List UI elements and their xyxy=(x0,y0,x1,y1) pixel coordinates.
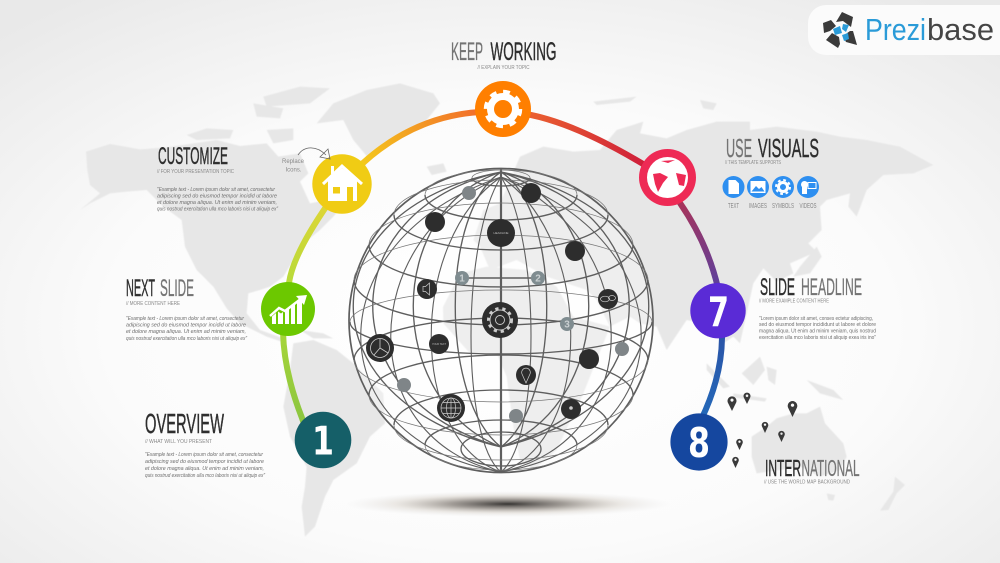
map: Greenland xyxy=(317,83,440,160)
arc segment: home to gear xyxy=(358,112,480,167)
heading: international: NATIONAL xyxy=(802,455,860,481)
body text: customize: "Example text - Lorem ipsum dolor sit amet, consectetur xyxy=(157,187,275,193)
logo badge xyxy=(808,5,1000,55)
step 7 circle xyxy=(690,283,746,338)
body text: next slide: adipiscing sed do eiusmod tempor incidid ut labore xyxy=(126,322,246,328)
body text: overview: et dolore magna aliqua. Ut enim ad minim veniam, xyxy=(145,466,264,472)
node: headline xyxy=(487,219,515,247)
home icon circle xyxy=(312,154,372,214)
pin 4 xyxy=(762,422,768,433)
step 8 circle xyxy=(670,413,728,471)
chart icon circle xyxy=(261,282,315,336)
map: North America xyxy=(80,140,367,343)
logo mark xyxy=(823,12,857,48)
icon: symbols xyxy=(772,176,794,198)
subheading: next slide: // MORE CONTENT HERE xyxy=(126,301,180,307)
icon: text xyxy=(722,176,744,198)
heading: keep working: KEEP xyxy=(451,38,483,66)
subheading: customize: // FOR YOUR PRESENTATION TOPIC xyxy=(157,169,234,175)
pin 7 xyxy=(732,457,739,468)
icon labels: SYMBOLS xyxy=(772,203,794,210)
node: number 1: 1 xyxy=(459,274,465,284)
node: map pin icon xyxy=(516,365,536,385)
pin 5 xyxy=(778,431,785,442)
map: Indonesia and New Guinea xyxy=(707,357,843,402)
wireframe globe xyxy=(349,168,653,473)
node: pie chart icon xyxy=(366,334,394,362)
arc segment: 1 to chart xyxy=(283,332,304,424)
map: Australia xyxy=(752,407,847,477)
pin 2 xyxy=(744,393,751,404)
heading: slide headline xyxy=(760,274,862,301)
note: replace icons: Icons. xyxy=(285,168,302,174)
pin 6 xyxy=(736,439,743,450)
node: dark lower right xyxy=(579,349,599,369)
map: South America xyxy=(283,340,385,537)
node: headline: HEADLINE xyxy=(493,231,509,235)
subheading: slide headline: // MORE EXAMPLE CONTENT HERE xyxy=(759,298,829,304)
note: replace icons: Replace xyxy=(282,159,305,165)
heading: keep working xyxy=(451,38,556,66)
map: Arctic islands xyxy=(187,87,447,175)
body text: slide headline: sed do eiusmod tempor incididunt ut labore et dolore xyxy=(759,322,876,328)
map pins xyxy=(728,393,797,468)
node: dark top right xyxy=(521,183,541,203)
node: number 3: 3 xyxy=(564,320,570,330)
node: central gear xyxy=(482,302,518,338)
arc segment: gear to globe xyxy=(526,114,648,167)
world map background xyxy=(80,83,933,537)
text: SLIDE xyxy=(160,275,194,302)
map: Tasmania xyxy=(827,493,835,501)
colored arc xyxy=(283,112,722,424)
map: Eurasia xyxy=(473,122,933,350)
heading: use visuals: USE xyxy=(726,133,752,163)
body text: slide headline: magna aliqua. Ut enim ad minim veniam, quis nostrud xyxy=(759,328,876,334)
body text: next slide: et dolore magna aliqua. Ut enim ad minim veniam, xyxy=(126,329,246,335)
map: Africa xyxy=(443,267,610,470)
arc segment: globe to 7 xyxy=(677,198,718,288)
globe nodes xyxy=(366,183,629,423)
map: Caribbean xyxy=(300,330,333,338)
heading: next slide: NEXT xyxy=(126,275,155,302)
logo wordmark xyxy=(865,13,994,47)
node: small text: YOUR TEXT xyxy=(432,343,447,346)
world icon circle xyxy=(639,149,696,206)
body text: overview xyxy=(145,452,266,479)
body text: slide headline: "Lorem ipsum dolor sit amet, conses ectetur adipiscing, xyxy=(759,316,873,322)
body text: next slide: quis nostrud exercitation ulla mco laboris nisi ut aliquip ex" xyxy=(126,336,248,342)
node: dark upper right xyxy=(565,241,585,261)
body text: customize: et dolore magna aliqua. Ut enim ad minim veniam, xyxy=(157,200,277,206)
map: Russian Arctic islands xyxy=(593,97,717,110)
subheading: keep working: // EXPLAIN YOUR TOPIC xyxy=(478,65,530,71)
pin 1 xyxy=(728,396,737,411)
icon labels: VIDEOS xyxy=(800,203,817,210)
icon: videos xyxy=(797,176,819,198)
pin 3 xyxy=(788,401,797,417)
heading: use visuals: VISUALS xyxy=(758,133,819,163)
step 8 circle: 8 xyxy=(688,419,710,467)
heading: use visuals xyxy=(726,133,819,163)
node: gray top xyxy=(462,186,476,200)
gear icon circle xyxy=(475,81,531,137)
body text: overview: adipiscing sed do eiusmod tempor incidid ut labore xyxy=(145,459,264,465)
map: New Zealand xyxy=(880,477,905,511)
node: dark bottom right xyxy=(561,399,581,419)
icon labels: TEXT xyxy=(728,203,739,210)
step 7 circle: 7 xyxy=(708,288,729,336)
body text: slide headline: exercitation ulla mco laboris nisi ut aliquip exea iris ino" xyxy=(759,335,876,341)
subheading: use visuals: // THIS TEMPLATE SUPPORTS xyxy=(725,160,781,166)
node: chat icon xyxy=(598,289,618,309)
heading: slide headline: HEADLINE xyxy=(801,274,862,301)
subheading: overview: // WHAT WILL YOU PRESENT xyxy=(145,439,213,445)
heading: overview: OVERVIEW xyxy=(145,408,224,439)
note: replace icons xyxy=(282,159,305,174)
node: globe icon xyxy=(437,394,465,422)
map: Japan xyxy=(793,247,822,277)
heading: international: INTER xyxy=(765,455,801,481)
node: number 3 xyxy=(560,317,574,331)
node: gray lower left xyxy=(397,378,411,392)
body text: slide headline xyxy=(759,316,876,341)
body text: customize xyxy=(157,187,279,212)
body text: customize: adipiscing sed do eiusmod tempor incidid ut labore xyxy=(157,194,277,200)
arrow: replace icons xyxy=(298,148,330,159)
node: number 2: 2 xyxy=(535,274,541,284)
logo wordmark: base xyxy=(927,13,994,47)
arc segment: chart to home xyxy=(288,204,328,288)
map: eastern hemisphere xyxy=(443,97,933,511)
body text: overview: "Example text - Lorem ipsum dolor sit amet, consectetur xyxy=(145,452,263,458)
node: gray right xyxy=(615,342,629,356)
node: small text xyxy=(429,334,449,354)
body text: overview: quis nostrud exercitation ulla mco laboris nisi ut aliquip ex" xyxy=(145,473,266,479)
ground shadow xyxy=(346,491,670,517)
node: number 2 xyxy=(531,271,545,285)
map: western hemisphere xyxy=(80,83,447,537)
body text: next slide: "Example text - Lorem ipsum dolor sit amet, consectetur xyxy=(126,316,244,322)
text: CUSTOMIZE xyxy=(158,143,228,170)
arc segment: 7 to 8 xyxy=(701,333,722,420)
node: number 1 xyxy=(455,271,469,285)
body text: next slide xyxy=(126,316,248,342)
heading: keep working: WORKING xyxy=(490,38,556,66)
step 1 circle: 1 xyxy=(312,420,334,464)
step 1 circle xyxy=(295,412,351,468)
node: speaker icon xyxy=(417,279,437,299)
node: gray bottom xyxy=(509,409,523,423)
icon: images xyxy=(747,176,769,198)
node: dark top left xyxy=(425,212,445,232)
heading: slide headline: SLIDE xyxy=(760,274,795,301)
subheading: international: // USE THE WORLD MAP BACKGROUND xyxy=(764,480,850,486)
body text: customize: quis nostrud exercitation ulla mco laboris nisi ut aliquip ex" xyxy=(157,206,279,212)
icon labels: IMAGES xyxy=(749,203,767,210)
logo wordmark: Prezi xyxy=(865,13,926,47)
icon labels xyxy=(728,203,817,210)
